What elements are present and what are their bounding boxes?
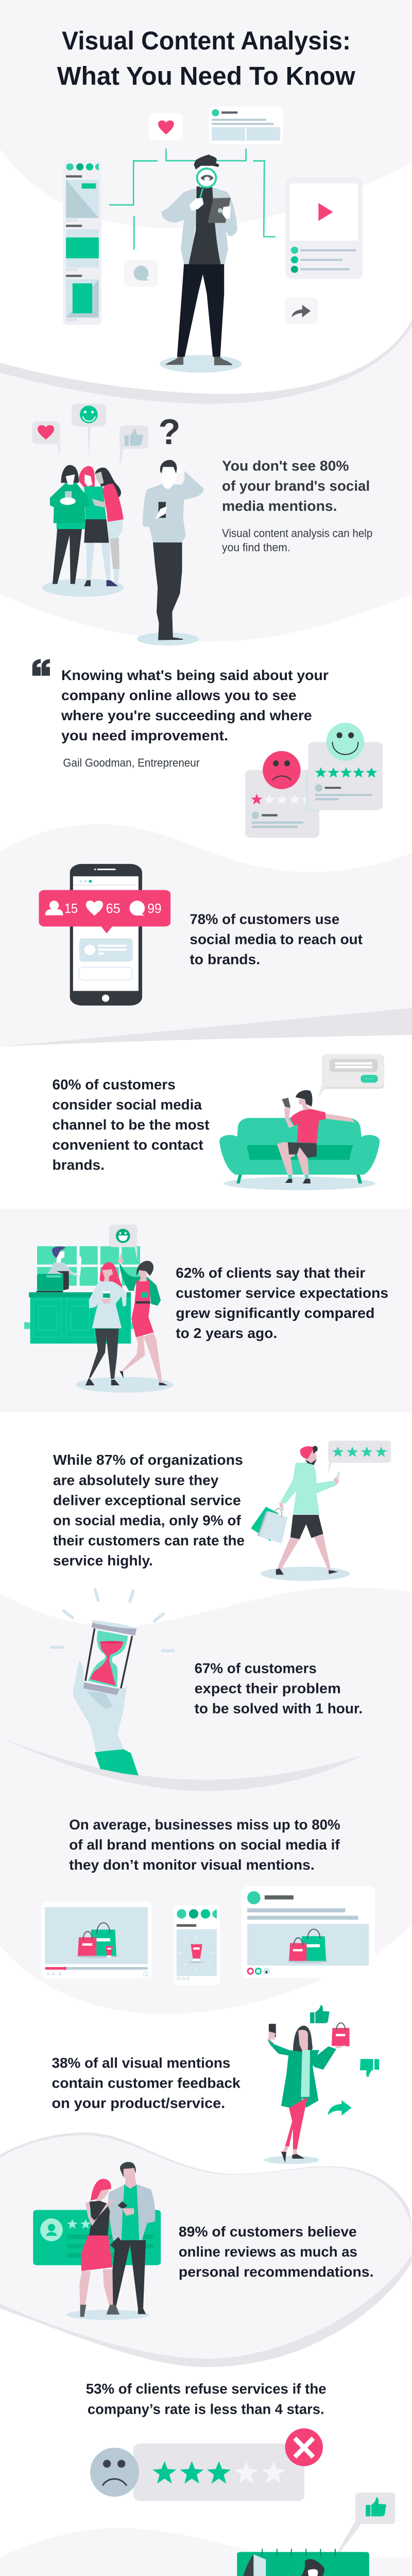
notification counts: 15 — [64, 901, 78, 916]
softbox on tripod — [220, 2554, 266, 2576]
text: missed mentions: of all brand mentions on social media if — [69, 1837, 340, 1853]
text: 62%: customer service expectations — [176, 1285, 388, 1301]
star bubble — [328, 1440, 391, 1474]
quote section art — [32, 659, 383, 838]
hourglass in hand — [51, 1590, 174, 1775]
heart card — [149, 113, 183, 141]
smiley bubble — [72, 404, 106, 457]
text: quote: Knowing what's being said about your — [61, 667, 329, 683]
text: 80% brand mentions: of your brand's social — [222, 478, 370, 494]
text: 87%: While 87% of organizations — [53, 1452, 243, 1468]
rating card illustration — [90, 2428, 323, 2501]
text: 80% brand mentions: you find them. — [222, 541, 290, 554]
man on sofa with chat bubble — [219, 1054, 384, 1190]
three women looking at phone — [42, 465, 124, 597]
thumb bubble — [119, 426, 148, 470]
phone with notification — [39, 864, 170, 1006]
text: 38% — [52, 2055, 241, 2111]
sofa — [219, 1118, 380, 1190]
text: 60%: 60% of customers — [53, 1077, 176, 1092]
text: 53%: 53% of clients refuse services if the — [86, 2381, 327, 2397]
hero illustration: analyst with magnifier and social cards — [63, 106, 363, 372]
shopper figure — [251, 1446, 350, 1581]
text: 62%: 62% of clients say that their — [176, 1265, 365, 1281]
video card — [41, 1902, 151, 1979]
text: 38%: contain customer feedback — [52, 2075, 241, 2091]
text: 60%: channel to be the most — [53, 1117, 210, 1132]
post card — [209, 106, 283, 144]
text: 67%: to be solved with 1 hour. — [195, 1700, 363, 1717]
notification counts: 65 — [106, 901, 121, 916]
text: 78%: to brands. — [190, 951, 260, 968]
text: 80% brand mentions: media mentions. — [222, 498, 337, 514]
video card — [286, 178, 363, 279]
woman presenting bag — [264, 2005, 379, 2164]
seated man — [277, 1090, 355, 1183]
text: 87%: their customers can rate the — [53, 1532, 245, 1549]
text: missed mentions: they don’t monitor visual mentions. — [69, 1857, 315, 1873]
shadow under man — [137, 587, 199, 646]
text: 62%: grew significantly compared — [176, 1305, 375, 1321]
window — [37, 1246, 140, 1286]
text: 89%: personal recommendations. — [179, 2264, 374, 2280]
couple figures — [66, 2162, 156, 2320]
text: 80% brand mentions — [222, 457, 372, 554]
negative review card — [245, 751, 319, 838]
text: 60%: consider social media — [53, 1096, 202, 1113]
heart bubble — [32, 421, 60, 456]
text: 62%: to 2 years ago. — [176, 1325, 277, 1341]
text: 38%: 38% of all visual mentions — [52, 2055, 230, 2071]
smiley bubble — [109, 1225, 137, 1260]
text: 78% — [190, 911, 363, 968]
text: missed mentions — [69, 1817, 340, 1873]
title — [57, 26, 355, 91]
text: 89% — [179, 2224, 374, 2280]
influencer woman — [271, 2559, 333, 2576]
text: 62% — [176, 1265, 388, 1341]
analyst figure — [160, 155, 242, 372]
text: quote — [61, 667, 329, 769]
cafe counter scene — [24, 1225, 174, 1393]
text: 53% — [86, 2381, 327, 2417]
text: missed mentions: On average, businesses miss up to 80% — [69, 1817, 340, 1833]
illustration: group of friends and puzzled man — [32, 404, 203, 640]
text: 87% — [53, 1452, 245, 1568]
text: 53%: company’s rate is less than 4 stars. — [88, 2401, 324, 2417]
comment card — [124, 260, 158, 287]
backdrop — [237, 2549, 369, 2576]
text: 67% — [195, 1660, 363, 1717]
text: 78%: 78% of customers use — [190, 911, 339, 927]
phone card — [174, 1905, 220, 1986]
question mark: ? — [159, 412, 180, 452]
shopper woman with rating bubble — [51, 1440, 391, 1775]
title: What You Need To Know — [57, 62, 355, 91]
social post card — [242, 1886, 375, 1978]
text: 80% brand mentions: Visual content analysis can help — [222, 527, 372, 540]
text: 89%: online reviews as much as — [179, 2244, 357, 2260]
thumb bubble — [329, 2493, 395, 2568]
notification counts: 99 — [147, 901, 162, 916]
barista — [47, 1246, 81, 1291]
text: 67%: 67% of customers — [195, 1660, 317, 1676]
share card — [285, 297, 318, 325]
two women — [76, 1253, 174, 1393]
text: 87%: deliver exceptional service — [53, 1492, 241, 1509]
text: 60% — [53, 1077, 210, 1173]
review card — [33, 2210, 161, 2265]
text: 89%: 89% of customers believe — [179, 2224, 357, 2240]
notification counts — [64, 901, 162, 916]
chat bubble — [318, 1054, 384, 1098]
feed phone — [63, 160, 101, 325]
text: quote: where you're succeeding and where — [61, 707, 312, 723]
text: 38%: on your product/service. — [52, 2095, 225, 2111]
counter — [24, 1274, 134, 1344]
man scratching head — [143, 460, 203, 640]
couple with review card — [33, 2162, 161, 2320]
connector lines — [109, 148, 276, 250]
text: 60%: convenient to contact — [53, 1137, 203, 1153]
title: Visual Content Analysis: — [62, 26, 351, 55]
text: 60%: brands. — [53, 1157, 105, 1173]
text: quote: you need improvement. — [61, 727, 228, 743]
text: quote: company online allows you to see — [61, 687, 297, 703]
text: 87%: on social media, only 9% of — [53, 1513, 241, 1528]
text: 80% brand mentions: You don't see 80% — [222, 457, 349, 474]
text: 67%: expect their problem — [195, 1681, 341, 1696]
text: quote: Gail Goodman, Entrepreneur — [63, 756, 200, 769]
visual mentions cards — [41, 1886, 375, 1986]
positive review card — [306, 723, 383, 811]
quotation mark — [32, 659, 50, 676]
text: 87%: are absolutely sure they — [53, 1472, 219, 1488]
photo shoot scene — [220, 2493, 395, 2576]
text: 87%: service highly. — [53, 1553, 153, 1568]
text: 78%: social media to reach out — [190, 931, 363, 947]
